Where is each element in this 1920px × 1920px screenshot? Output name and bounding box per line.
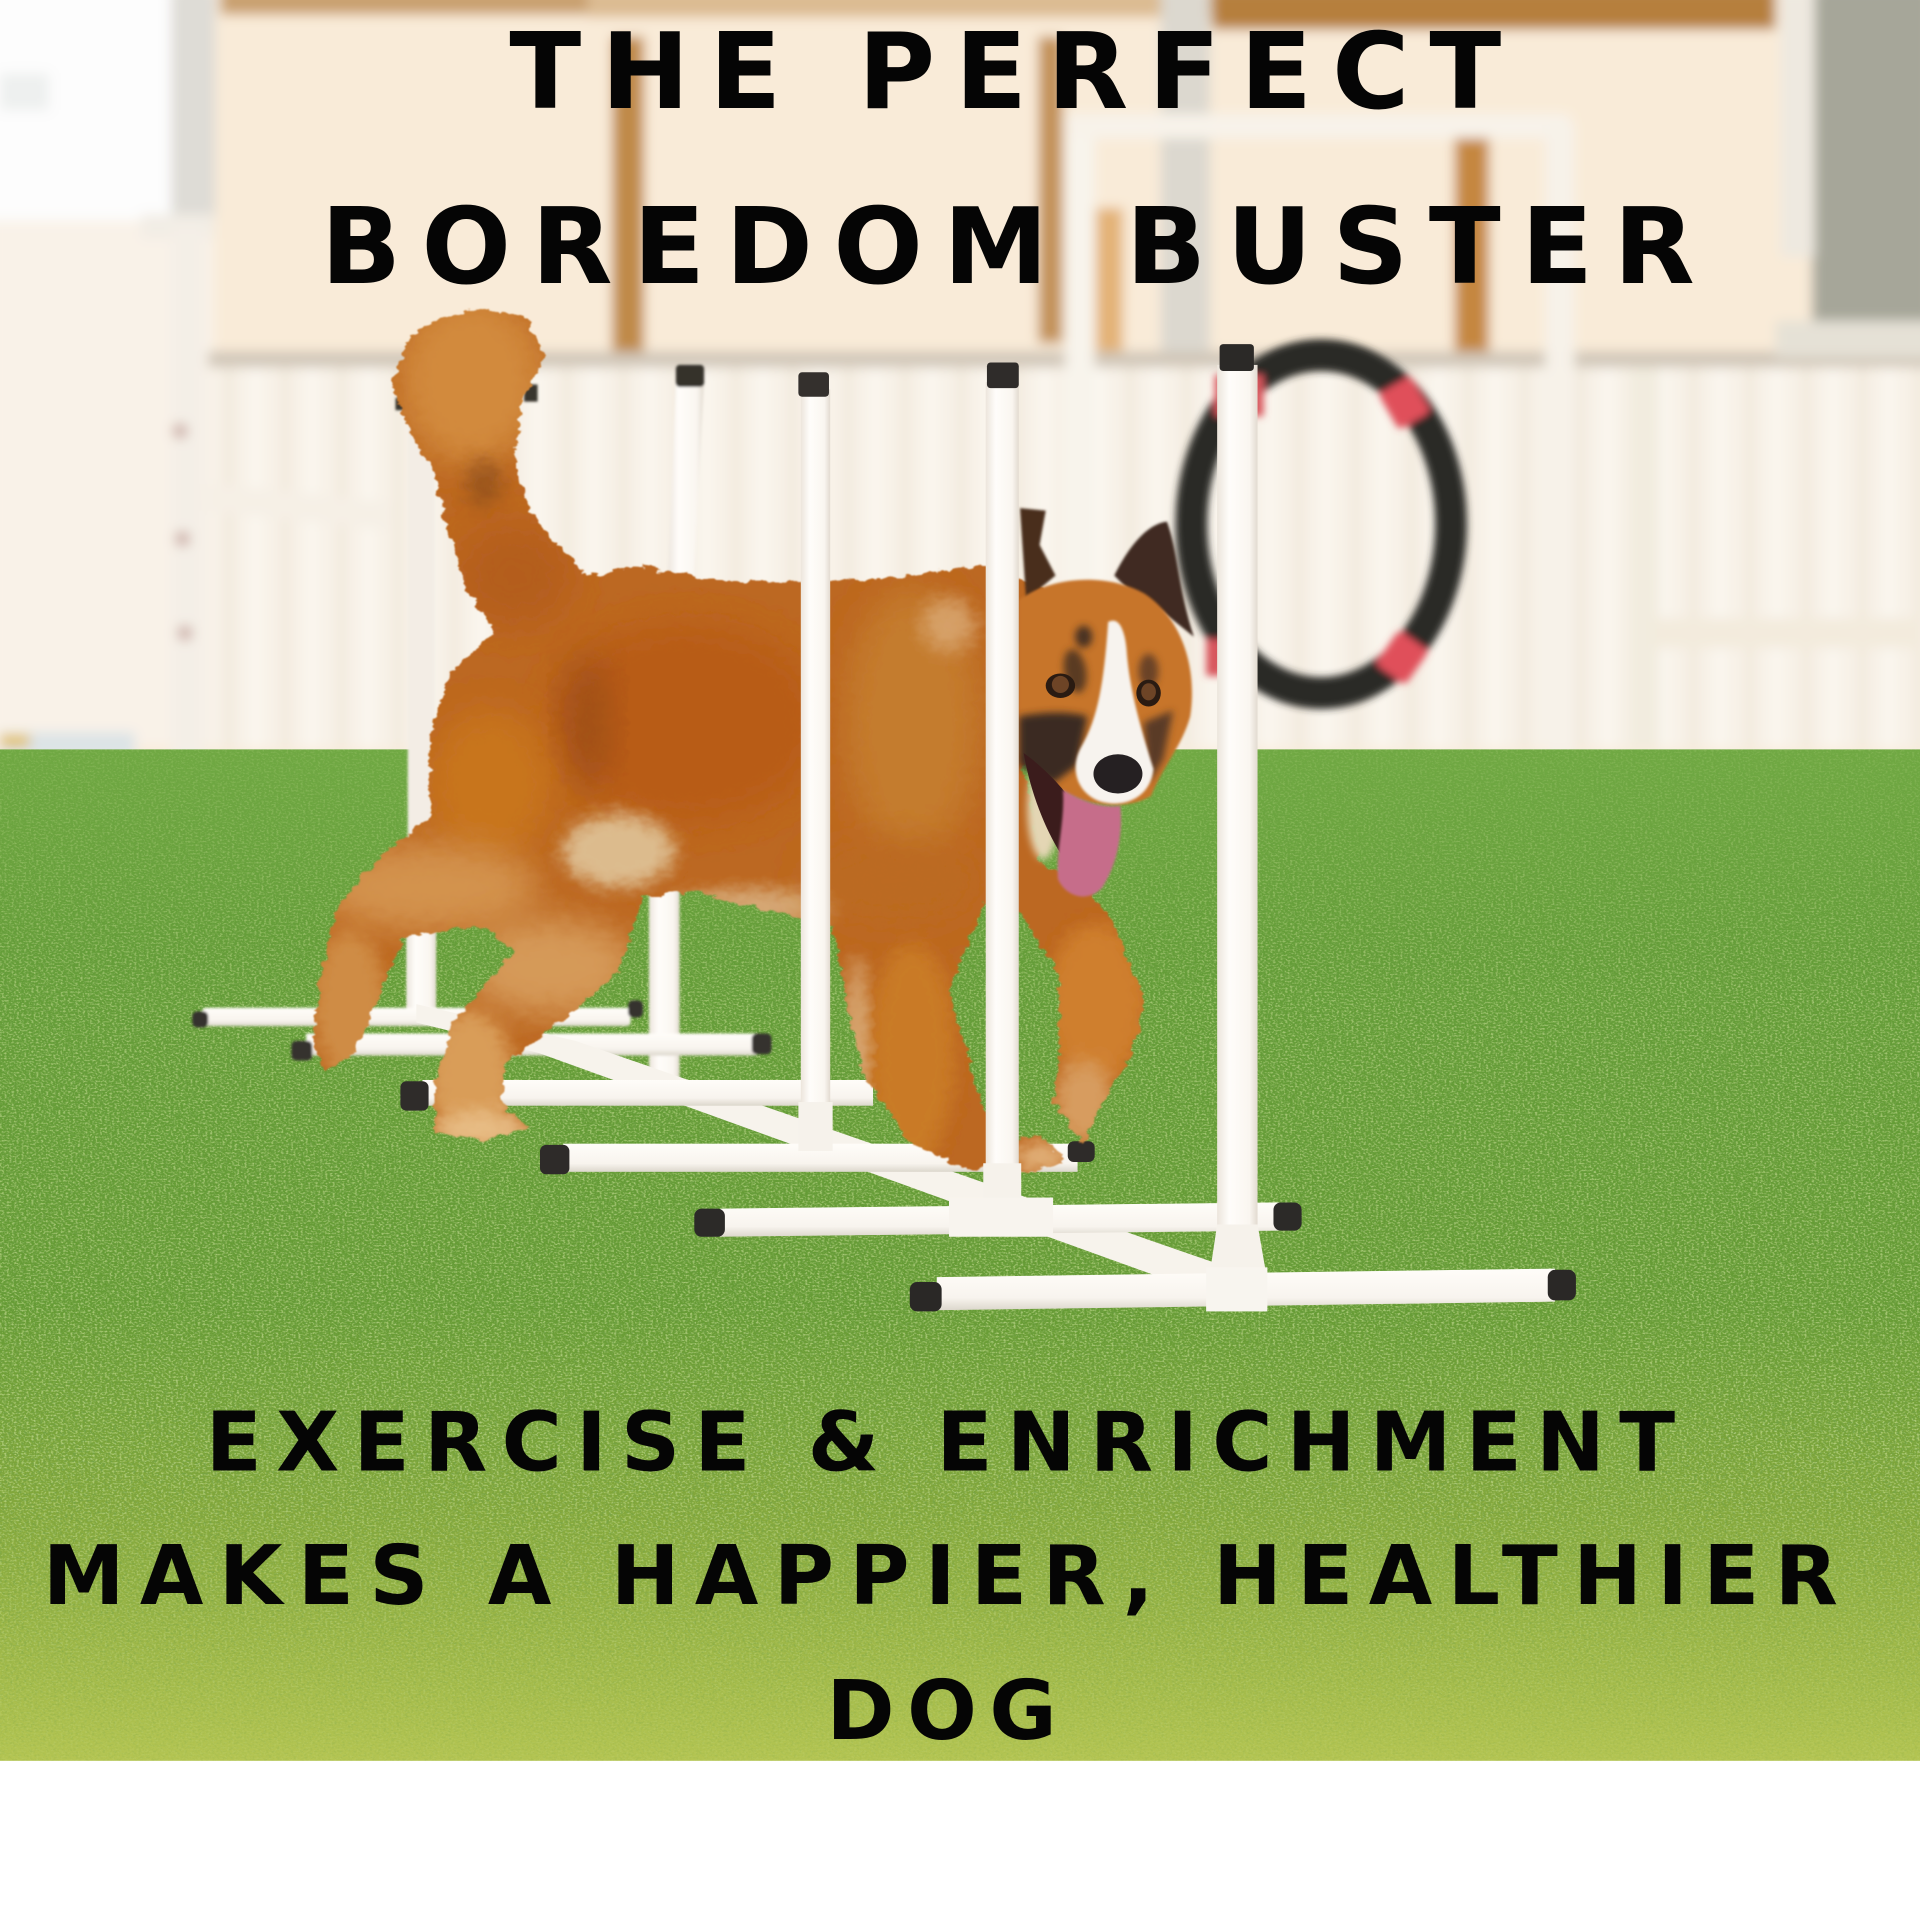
background: agility tyre ring [1191,355,1451,693]
artificial grass [0,749,1920,1761]
base 5 [694,1198,1302,1237]
base 2 [291,1033,771,1060]
dog [312,294,1194,1173]
tagline: EXERCISE & ENRICHMENT [206,1396,1675,1491]
title: THE PERFECT [509,10,1501,133]
title [321,10,1695,308]
nose [1093,754,1142,793]
title: BOREDOM BUSTER [321,185,1695,308]
tagline [43,1396,1838,1759]
head [1019,580,1192,805]
base 1 [192,1000,643,1027]
pole 3 [798,372,833,1151]
open mouth [1024,753,1068,857]
tongue [1058,790,1121,897]
background: training hall wall [0,0,1920,771]
pole 4 [983,362,1021,1210]
rear weave poles and bases [192,365,1224,1293]
dog body, tail and legs [312,294,1145,1173]
right ear [1114,522,1194,637]
base 3 [422,1080,873,1106]
dark face patches [1019,626,1173,784]
tagline: MAKES A HAPPIER, HEALTHIER [43,1529,1838,1624]
base 4 [540,1141,1095,1174]
left ear [1020,508,1056,600]
pole 5 [1210,344,1266,1277]
tagline: DOG [827,1664,1057,1759]
base 6 [910,1267,1576,1311]
chest fur [1027,757,1059,860]
front weave poles and bases [694,344,1576,1311]
long connecting bar [416,1004,1224,1293]
eyes [1046,673,1161,707]
white blaze [1076,621,1153,804]
